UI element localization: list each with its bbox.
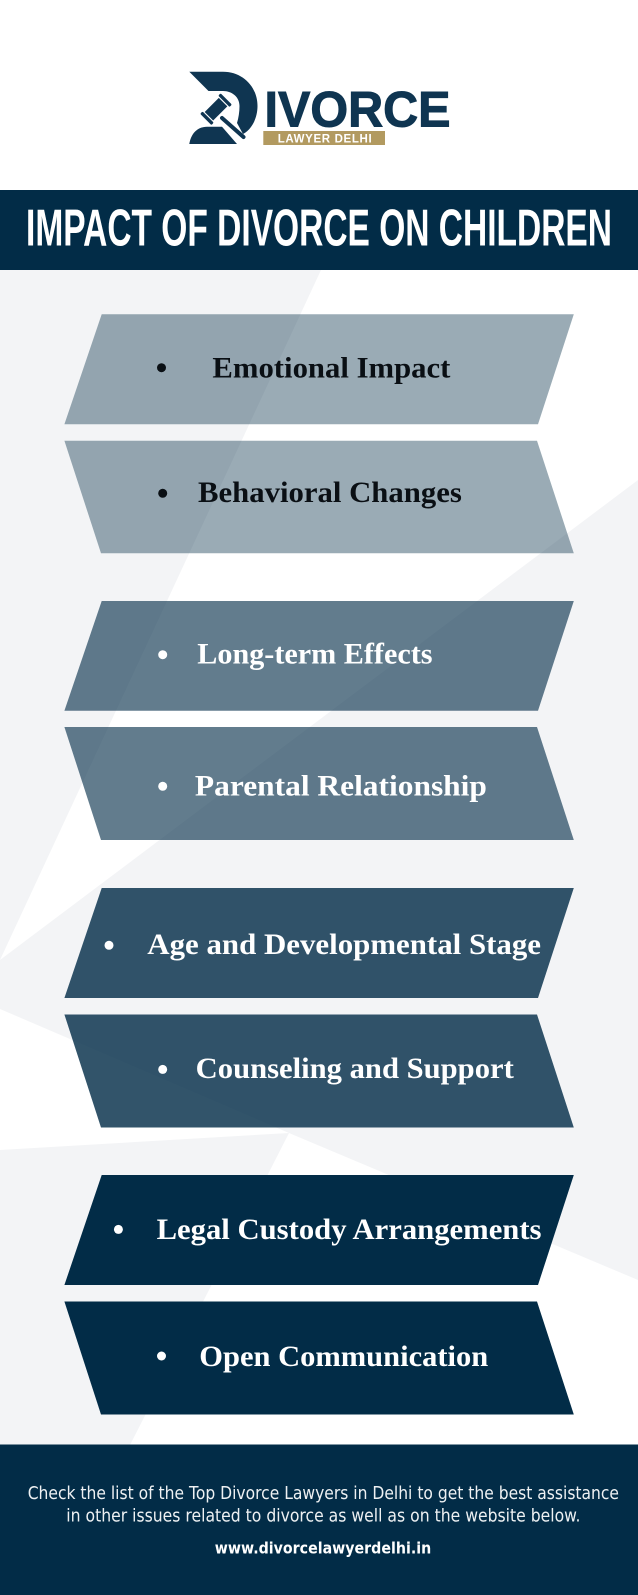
panel: Long-term Effects: Long-term Effects bbox=[197, 637, 432, 670]
website url: www.divorcelawyerdelhi.in bbox=[215, 1539, 431, 1558]
panel: Counseling and Support: Counseling and Support bbox=[196, 1052, 514, 1085]
panel: Open Communication bbox=[64, 1302, 574, 1414]
icon: letter D with gavel bbox=[189, 72, 258, 144]
footer panel bbox=[0, 1444, 638, 1595]
panel: Emotional Impact: Emotional Impact bbox=[212, 351, 450, 384]
panel: Behavioral Changes: Behavioral Changes bbox=[198, 476, 462, 509]
panel: Parental Relationship bbox=[64, 727, 574, 840]
panel: Legal Custody Arrangements: Legal Custody Arrangements bbox=[157, 1213, 542, 1246]
panel: Long-term Effects bbox=[64, 601, 574, 711]
panel: Open Communication: Open Communication bbox=[199, 1340, 489, 1373]
logo tag: Lawyer Delhi: LAWYER DELHI bbox=[278, 134, 372, 146]
logo word: IVORCE: IVORCE bbox=[264, 82, 450, 138]
footer text bbox=[28, 1484, 619, 1527]
panel: Parental Relationship: Parental Relationship bbox=[195, 769, 487, 802]
footer text: in other issues related to divorce as well as on the website below. bbox=[66, 1507, 581, 1527]
title banner bbox=[0, 190, 638, 270]
panel: Emotional Impact bbox=[64, 314, 574, 424]
logo tag: Lawyer Delhi bbox=[263, 131, 385, 146]
panel: Age and Developmental Stage: Age and Developmental Stage bbox=[147, 928, 541, 961]
panel: Counseling and Support bbox=[64, 1014, 574, 1128]
panel: Age and Developmental Stage bbox=[64, 888, 574, 998]
panel: Behavioral Changes bbox=[64, 441, 574, 553]
panel: Legal Custody Arrangements bbox=[64, 1175, 574, 1285]
logo: Divorce Lawyer Delhi bbox=[189, 72, 451, 146]
